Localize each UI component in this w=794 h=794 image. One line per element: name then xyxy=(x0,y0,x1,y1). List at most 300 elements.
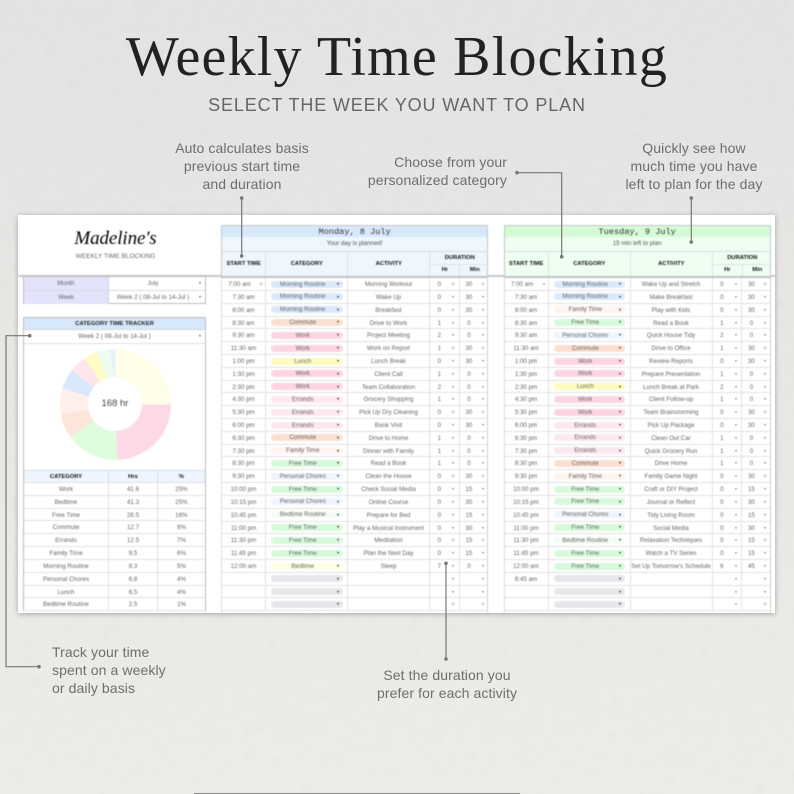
row: 5:30 pm: 0 xyxy=(720,409,724,416)
row: 2:30 pm: Work xyxy=(296,383,310,390)
row: 11:00 pm: Free Time xyxy=(289,524,317,531)
Tuesday column headers: DURATION xyxy=(727,255,757,261)
row: 11:30 pm: 0 xyxy=(438,537,441,544)
arrow: time left xyxy=(690,196,693,244)
row: 1:30 pm xyxy=(504,368,770,381)
row: 11:45 pm: 0 xyxy=(720,550,724,557)
callout: choose category: personalized category xyxy=(368,172,507,188)
empty row xyxy=(222,586,487,598)
row: 11:00 pm: 11:00 pm xyxy=(231,524,256,532)
row: Bedtime xyxy=(24,496,205,509)
row: 10:15 pm: 0 xyxy=(438,499,441,506)
row: Personal Chores: 6.8 xyxy=(129,576,137,583)
row: 6:00 pm: 0 xyxy=(438,422,441,429)
Monday column headers: START TIME xyxy=(226,261,261,267)
row: 11:00 pm: 30 xyxy=(465,524,472,532)
row: Lunch: 4% xyxy=(177,588,186,596)
row: 7:30 am xyxy=(222,291,487,304)
row: 2:30 pm: 0 xyxy=(467,384,471,391)
row: 4:30 pm: 0 xyxy=(467,396,471,403)
row: 5:30 pm: 30 xyxy=(748,409,755,416)
Monday status: Your day is planned! xyxy=(327,240,383,247)
row: Bedtime Routine: 1% xyxy=(177,601,186,608)
panel: month and week selector xyxy=(23,276,206,304)
row: 7:30 pm: Quick Grocery Run xyxy=(645,448,697,455)
row: 12:00 am: Free Time xyxy=(571,563,599,570)
row: Bedtime Routine xyxy=(24,598,205,611)
row: 10:15 pm xyxy=(504,496,770,509)
brand heading: WEEKLY TIME BLOCKING xyxy=(76,252,155,260)
row: 1:30 pm: Prepare Presentation xyxy=(642,371,700,378)
row: 8:00 am: 0 xyxy=(720,307,724,314)
row: Lunch: Lunch xyxy=(58,588,74,596)
row: 11:30 am: Drive to Office xyxy=(651,345,691,352)
frozen header line xyxy=(18,275,775,277)
row: 10:45 pm: 10:45 pm xyxy=(513,512,539,519)
row: 5:30 pm: Pick Up Dry Cleaning xyxy=(359,409,418,416)
row: Morning Routine: Morning Routine xyxy=(43,563,89,570)
row: 9:30 am xyxy=(222,329,487,342)
row: 12:00 am xyxy=(222,560,487,573)
row: 9:30 am: 2 xyxy=(438,332,441,339)
row: 7:30 am: 7:30 am xyxy=(232,294,255,301)
row: 1:00 pm: 1:00 pm xyxy=(232,358,255,365)
row: 7:30 pm: Family Time xyxy=(286,447,319,454)
tracker heading: CATEGORY TIME TRACKER xyxy=(75,320,154,326)
tracker week dropdown xyxy=(24,330,205,344)
row: 1:00 pm: 0 xyxy=(720,358,724,365)
row: Work: Work xyxy=(59,486,73,493)
row: 11:30 pm: 11:30 pm xyxy=(231,537,256,544)
row: 6:30 pm: 0 xyxy=(750,435,753,442)
row: 1:30 pm: 1 xyxy=(438,371,441,378)
row: 10:00 pm: Check Social Media xyxy=(361,486,416,493)
row: 9:30 am: Project Meeting xyxy=(367,332,410,339)
row: 10:15 pm: 10:15 pm xyxy=(513,499,539,506)
row: 1:30 pm: 1 xyxy=(720,371,724,378)
row: 11:30 am: 30 xyxy=(748,345,755,352)
row: 11:30 pm: 15 xyxy=(465,537,472,544)
row: Family Time: 9.5 xyxy=(129,550,137,557)
row: 11:00 pm xyxy=(504,522,770,534)
row: 8:30 am xyxy=(222,316,487,329)
brand heading xyxy=(74,228,157,260)
donut centre total xyxy=(88,377,142,431)
row: 8:00 am: 30 xyxy=(748,307,755,314)
row: 8:00 am: 0 xyxy=(438,307,441,314)
row: 8:30 pm: 0 xyxy=(467,460,471,467)
Tuesday column headers: CATEGORY xyxy=(573,261,605,267)
row: 7:00 am: Wake Up and Stretch xyxy=(642,281,700,288)
row: 9:30 am: 0 xyxy=(750,332,753,339)
row: 5:30 pm xyxy=(222,406,487,419)
Tuesday column headers xyxy=(504,251,771,276)
row: 11:45 pm: 0 xyxy=(438,550,441,557)
row: 2:30 pm: Team Collaboration xyxy=(362,384,415,391)
row: 7:00 am: Morning Workout xyxy=(365,281,412,288)
row: 10:00 pm: 15 xyxy=(465,486,472,493)
row: 6:00 pm: Bank Visit xyxy=(375,422,402,429)
donut centre total: 168 hr xyxy=(102,398,128,409)
row: 8:30 pm: 8:30 pm xyxy=(232,460,255,467)
row: 9:30 pm: 30 xyxy=(465,473,472,480)
empty row xyxy=(504,598,770,611)
row: 6:00 pm: 0 xyxy=(720,422,724,429)
row: 6:45 am xyxy=(504,573,770,586)
row: 4:30 pm: 1 xyxy=(438,396,441,403)
row: Commute: Commute xyxy=(53,524,79,531)
subtitle: SELECT THE WEEK YOU WANT TO PLAN xyxy=(208,95,586,115)
row: 8:30 pm: Free Time xyxy=(289,460,317,467)
row: 1:00 pm: 0 xyxy=(438,358,441,365)
row: 2:30 pm: 2 xyxy=(438,384,441,391)
callout: track time: Track your time xyxy=(52,644,149,660)
row: 7:30 pm: 7:30 pm xyxy=(232,448,255,455)
row: Bedtime Routine: 2.5 xyxy=(129,601,137,608)
row: 6:00 pm: Pick Up Package xyxy=(647,422,695,429)
callout: time left: much time you have xyxy=(630,158,758,174)
week row: Week 2 ( 08-Jul to 14-Jul ) xyxy=(117,294,189,301)
callout: choose category: Choose from your xyxy=(394,154,507,170)
row: 11:45 pm xyxy=(504,547,770,560)
row: 8:00 am xyxy=(504,304,770,316)
callout: auto calculates: previous start time xyxy=(184,158,300,174)
row: 5:30 pm: Errands xyxy=(292,409,314,416)
row: 7:30 pm xyxy=(504,445,770,457)
row: 8:00 am: 8:00 am xyxy=(515,307,537,314)
row: 11:45 pm: 15 xyxy=(748,550,755,557)
row: 1:00 pm: Work xyxy=(578,358,592,365)
row: 6:00 pm: 6:00 pm xyxy=(515,422,537,429)
row: 7:30 am: Wake Up xyxy=(376,294,401,301)
row: 7:30 pm: 7:30 pm xyxy=(515,448,537,455)
row: 2:30 pm: Lunch Break at Park xyxy=(643,384,699,391)
row: 11:00 pm: Social Media xyxy=(653,524,689,532)
Tuesday date heading xyxy=(504,225,771,237)
row: 10:15 pm: Online Course xyxy=(369,499,408,506)
row: 7:00 am xyxy=(222,278,487,291)
empty row xyxy=(222,573,487,586)
row: 1:30 pm: 0 xyxy=(750,371,753,378)
row: 11:30 am: Work on Report xyxy=(367,345,410,352)
callout: track time: spent on a weekly xyxy=(52,662,166,678)
row: Personal Chores: 4% xyxy=(177,576,186,583)
row: 6:30 pm: Clean Out Car xyxy=(651,435,691,442)
row: 1:00 pm: Lunch xyxy=(294,358,311,365)
row: 1:00 pm: 30 xyxy=(748,358,755,365)
row: 6:00 pm: Errands xyxy=(292,422,314,429)
row: 8:30 am xyxy=(504,316,770,329)
row: 6:30 pm: 1 xyxy=(720,435,724,442)
Tuesday status: 15 min left to plan xyxy=(613,240,662,247)
Monday column headers xyxy=(221,251,488,276)
row: 10:15 pm: 30 xyxy=(748,499,755,506)
row: 8:30 pm: Drive Home xyxy=(655,460,687,467)
row: 4:30 pm: Errands xyxy=(292,396,314,403)
Tuesday column headers: ACTIVITY xyxy=(658,261,684,267)
row: 9:30 pm: 30 xyxy=(748,473,755,480)
row: 11:45 pm: Free Time xyxy=(571,550,599,557)
row: 8:30 am: Commute xyxy=(289,319,316,326)
row: 11:30 pm xyxy=(504,534,770,547)
row: 11:30 pm: Free Time xyxy=(289,537,317,544)
row: 8:30 am: Free Time xyxy=(571,319,599,326)
tracker week dropdown: Week 2 ( 08-Jul to 14-Jul ) xyxy=(78,333,151,340)
Tuesday date heading: Tuesday, 9 July xyxy=(598,227,676,237)
row: 11:30 am: 11:30 am xyxy=(231,345,256,352)
row: 10:00 pm xyxy=(504,483,770,496)
row: 7:30 pm xyxy=(222,445,487,457)
row: 8:30 pm xyxy=(504,457,770,470)
Monday date heading xyxy=(221,225,488,237)
row: 6:00 pm xyxy=(504,419,770,432)
row: 6:00 pm xyxy=(222,419,487,432)
row: Free Time: Free Time xyxy=(52,512,80,519)
row: 6:30 pm xyxy=(504,432,770,445)
row: 10:45 pm: Bedtime Routine xyxy=(280,511,326,518)
row: 9:30 pm: Family Game Night xyxy=(645,473,697,480)
row: 7:30 am: 0 xyxy=(438,294,441,301)
row: 1:30 pm: Work xyxy=(578,370,592,377)
Monday column headers: ACTIVITY xyxy=(376,261,402,267)
row: Commute xyxy=(24,521,205,534)
row: 4:30 pm: 4:30 pm xyxy=(232,396,255,403)
row: 7:30 pm: Errands xyxy=(574,447,596,454)
row: 11:45 pm: 11:45 pm xyxy=(513,550,539,557)
callout: set duration xyxy=(377,667,517,701)
row: Errands: Errands xyxy=(55,537,77,544)
row: 10:15 pm: 10:15 pm xyxy=(231,499,256,506)
row: 9:30 am: 2 xyxy=(720,332,724,339)
row: 9:30 pm: Clean the House xyxy=(365,473,412,480)
row: 6:00 pm: 6:00 pm xyxy=(232,422,255,429)
title: Weekly Time Blocking xyxy=(126,26,668,88)
row: 5:30 pm: 0 xyxy=(438,409,441,416)
row: 8:30 am: 8:30 am xyxy=(232,320,255,326)
donut chart xyxy=(60,348,170,460)
row: 9:30 pm: 9:30 pm xyxy=(515,473,537,480)
row: 11:00 pm: 0 xyxy=(720,524,724,532)
row: 6:00 pm: 30 xyxy=(748,422,755,429)
row: 4:30 pm: 1 xyxy=(720,396,724,403)
row: 10:45 pm: Tidy Living Room xyxy=(647,512,695,519)
row: 11:30 am: 1 xyxy=(438,345,441,352)
row: 7:00 am: 7:00 am xyxy=(228,281,251,288)
row: 1:00 pm xyxy=(222,355,487,368)
row: 6:30 pm: Drive to Home xyxy=(369,435,408,442)
row: Personal Chores: Personal Chores xyxy=(43,576,89,583)
row: 7:30 pm: 1 xyxy=(720,448,724,455)
row: 11:30 pm: Meditation xyxy=(374,537,403,544)
row: 10:45 pm: 15 xyxy=(748,512,755,519)
row: 10:00 pm: Free Time xyxy=(571,486,599,493)
arrow: category xyxy=(515,171,564,258)
row: 8:30 pm xyxy=(222,457,487,470)
row: 6:30 pm: 1 xyxy=(438,435,441,442)
row: 10:15 pm: 30 xyxy=(465,499,472,506)
row: Errands xyxy=(24,534,205,547)
row: 5:30 pm: Team Brainstorming xyxy=(643,409,699,416)
row: 8:00 am: Morning Routine xyxy=(280,306,325,313)
row: Family Time: Family Time xyxy=(49,550,83,557)
row: 9:30 am: 9:30 am xyxy=(232,332,255,339)
brand heading: Madeline's xyxy=(74,228,157,249)
row: 12:00 am: 0 xyxy=(467,563,471,570)
row: 9:30 pm: 0 xyxy=(438,473,441,480)
row: 12:00 am: 12:00 am xyxy=(513,563,539,570)
row: 7:30 am: Make Breakfast xyxy=(650,294,692,301)
row: 4:30 pm: Grocery Shopping xyxy=(364,396,413,403)
row: 10:45 pm: 10:45 pm xyxy=(231,512,256,519)
row: 8:30 am: Drive to Work xyxy=(370,320,407,326)
callout: set duration: Set the duration you xyxy=(383,667,511,683)
row: Bedtime: 25% xyxy=(175,499,188,506)
row: 1:00 pm: Lunch Break xyxy=(371,358,406,365)
row: 7:00 am: 7:00 am xyxy=(511,281,533,288)
row: 1:00 pm: Review Reports xyxy=(649,358,693,365)
row: 12:00 am: Bedtime xyxy=(291,563,314,570)
row: 1:30 pm: 1:30 pm xyxy=(515,371,537,378)
row: Morning Routine: 8.3 xyxy=(129,563,137,570)
row: Work xyxy=(24,483,205,496)
Tuesday column headers: Hr xyxy=(724,267,731,273)
row: 4:30 pm: 4:30 pm xyxy=(515,396,537,403)
row: 8:30 pm: 8:30 pm xyxy=(515,460,537,467)
row: 7:00 am: 30 xyxy=(465,281,472,288)
row: 1:00 pm: 30 xyxy=(465,358,472,365)
row: 11:30 am: 30 xyxy=(465,345,472,352)
row: 7:00 am xyxy=(504,278,770,291)
row: Personal Chores xyxy=(24,573,205,586)
row: 8:30 pm: 1 xyxy=(720,460,724,467)
callout: time left: Quickly see how xyxy=(642,140,746,156)
row: 7:30 am: 0 xyxy=(720,294,724,301)
Tuesday rows xyxy=(504,276,771,613)
Tuesday column headers: START TIME xyxy=(509,261,543,267)
row: Free Time: 26.5 xyxy=(127,512,139,519)
row: 10:45 pm xyxy=(504,509,770,522)
row: 12:00 am: 45 xyxy=(748,563,755,570)
row: 7:00 am: 30 xyxy=(748,281,755,288)
row: Bedtime: Bedtime xyxy=(55,499,77,506)
row: 10:00 pm: 10:00 pm xyxy=(513,486,539,493)
category table header xyxy=(24,470,205,483)
row: 2:30 pm xyxy=(504,381,770,393)
row: 8:30 am: 1 xyxy=(720,320,724,326)
row: Errands: 7% xyxy=(177,537,186,544)
category table header: % xyxy=(179,474,184,480)
row: 11:30 pm: 0 xyxy=(720,537,724,544)
row: 9:30 pm: Personal Chores xyxy=(280,473,326,480)
row: 9:30 pm xyxy=(504,470,770,483)
row: 6:00 pm: Errands xyxy=(574,422,596,429)
row: Morning Routine xyxy=(24,560,205,573)
row: 6:30 pm: 0 xyxy=(467,435,471,442)
panel: category time tracker xyxy=(23,316,206,611)
row: 11:00 pm: 11:00 pm xyxy=(513,524,539,532)
callout: set duration: prefer for each activity xyxy=(377,685,517,701)
callout: auto calculates: and duration xyxy=(202,176,282,192)
row: 1:30 pm: 0 xyxy=(467,371,471,378)
row: 7:30 am: 30 xyxy=(465,294,472,301)
row: 6:00 pm: 30 xyxy=(465,422,472,429)
row: 8:00 am: Family Time xyxy=(569,306,602,313)
row: Work: 25% xyxy=(175,486,188,493)
callout: track time xyxy=(52,644,166,696)
Monday rows xyxy=(221,276,488,613)
row: 9:30 am: Quick House Tidy xyxy=(647,332,695,339)
row: 2:30 pm: 2 xyxy=(720,384,724,391)
row: 10:45 pm: Prepare for Bed xyxy=(367,512,410,519)
Tuesday status xyxy=(504,237,771,251)
row: 6:45 am: 6:45 am xyxy=(515,576,537,583)
row: 7:30 am: 30 xyxy=(748,294,755,301)
category table header: CATEGORY xyxy=(50,474,82,480)
row: 12:00 am: Sleep xyxy=(381,563,396,570)
row: 9:30 pm: 0 xyxy=(720,473,724,480)
row: 11:30 pm: 15 xyxy=(748,537,755,544)
row: Bedtime: 41.3 xyxy=(127,499,139,506)
panel: Tuesday schedule xyxy=(504,224,772,613)
row: 9:30 am: 0 xyxy=(467,332,471,339)
row: 9:30 pm xyxy=(222,470,487,483)
row: Work: 41.6 xyxy=(127,486,139,493)
row: 8:00 am: Play with Kids xyxy=(652,307,690,314)
row: 2:30 pm xyxy=(222,381,487,393)
row: 1:30 pm: Work xyxy=(296,370,310,377)
row: 11:30 am xyxy=(504,342,770,355)
row: 8:30 pm: 1 xyxy=(438,460,441,467)
row: 11:45 pm: Free Time xyxy=(289,550,317,557)
row: 10:00 pm: Free Time xyxy=(289,486,317,493)
row: 1:30 pm: Client Call xyxy=(374,371,403,378)
row: Family Time: 6% xyxy=(177,550,186,557)
row: 11:30 am: 11:30 am xyxy=(513,345,539,352)
Monday column headers: CATEGORY xyxy=(291,261,323,267)
row: 1:00 pm xyxy=(504,355,770,368)
row: 7:30 pm: 0 xyxy=(750,448,753,455)
white sheet panel xyxy=(18,215,775,613)
row: 10:45 pm xyxy=(222,509,487,522)
row: 10:00 pm: Craft or DIY Project xyxy=(644,486,698,493)
row: 4:30 pm: Client Follow-up xyxy=(649,396,693,403)
row: 11:45 pm: Plan the Next Day xyxy=(364,550,413,557)
row: 11:30 am: 1 xyxy=(720,345,724,352)
row: 10:45 pm: 15 xyxy=(465,512,472,519)
row: 2:30 pm: 2:30 pm xyxy=(515,384,537,391)
row: 1:30 pm xyxy=(222,368,487,381)
row: 11:45 pm xyxy=(222,547,487,560)
row: Commute: 8% xyxy=(177,524,186,531)
row: 7:30 am: 7:30 am xyxy=(515,294,537,301)
row: 6:30 pm: 6:30 pm xyxy=(515,435,537,442)
callout: auto calculates: Auto calculates basis xyxy=(175,140,309,156)
row: 6:30 pm xyxy=(222,432,487,445)
row: 2:30 pm: Lunch xyxy=(577,383,594,390)
row: Bedtime Routine: Bedtime Routine xyxy=(43,601,89,608)
row: 1:00 pm: 1:00 pm xyxy=(515,358,537,365)
row: Errands: 12.5 xyxy=(127,537,139,544)
row: 11:00 pm: 30 xyxy=(748,524,755,532)
empty row xyxy=(222,598,487,611)
row: 10:15 pm: 0 xyxy=(720,499,724,506)
row: 10:45 pm: 0 xyxy=(720,512,724,519)
row: 11:30 pm: Relaxation Techniques xyxy=(640,537,702,544)
callout: time left xyxy=(625,140,763,192)
row: 11:00 pm: 0 xyxy=(438,524,441,532)
Monday column headers: Hr xyxy=(442,267,448,273)
row: 10:45 pm: Personal Chores xyxy=(562,511,608,518)
